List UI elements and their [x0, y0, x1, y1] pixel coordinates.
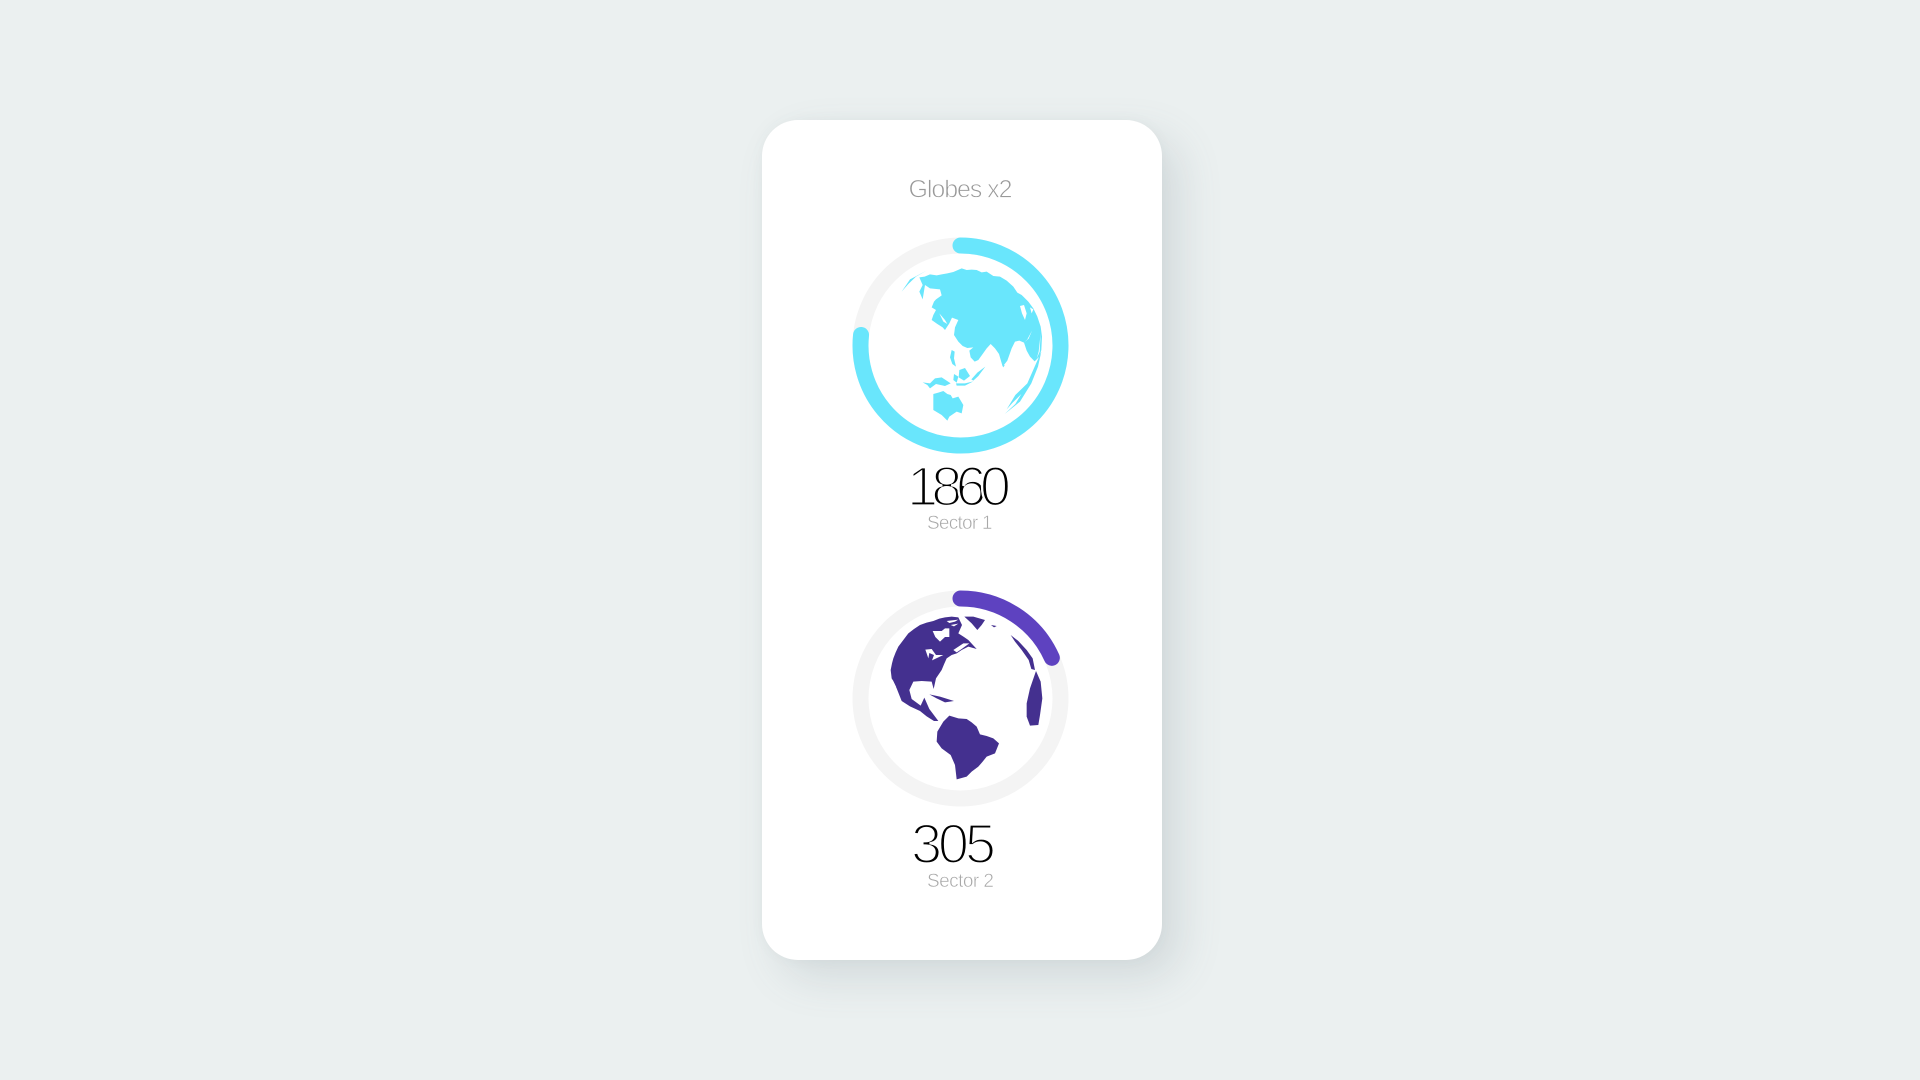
ring track 1	[860, 246, 1060, 446]
value: 1860: 1860	[907, 454, 1011, 518]
label: Sector 2: Sector 2	[927, 871, 994, 892]
icon: globe Americas	[891, 617, 1042, 779]
icon: globe Asia and Australia	[902, 268, 1042, 421]
panel: card	[762, 120, 1162, 960]
progress arc 1	[860, 246, 1060, 446]
chart: sector 2 globe with progress ring	[860, 598, 1060, 798]
value: 305: 305	[911, 812, 996, 875]
progress arc 2	[960, 598, 1052, 658]
title: Globes x2	[908, 176, 1012, 204]
label: Sector 1: Sector 1	[927, 513, 992, 534]
chart: sector 1 globe with progress ring	[860, 246, 1060, 446]
ring track 2	[860, 598, 1060, 798]
